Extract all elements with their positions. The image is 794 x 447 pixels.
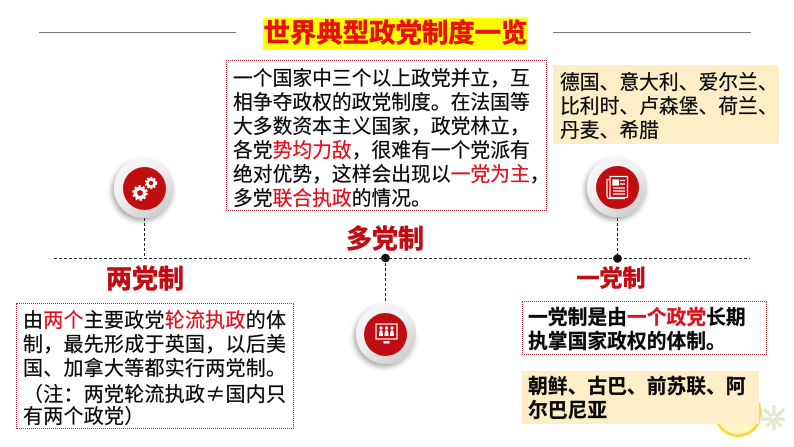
panel: multi-party definition: 一个国家中三个以上政党并立，互 <box>233 68 530 90</box>
panel: two-party definition: 有两个政党） <box>23 406 144 428</box>
panel: multi-party definition: 绝对优势，这样会出现以一党为主， <box>233 164 550 186</box>
panel: two-party definition: （注：两党轮流执政 国内只 <box>23 384 286 406</box>
heading: one-party: 一党制 <box>576 265 646 291</box>
panel: multi-party countries: 比利时、卢森堡、荷兰、 <box>560 96 778 118</box>
panel: one-party countries: 尔巴尼亚 <box>528 400 607 422</box>
panel: one-party countries <box>522 371 759 424</box>
panel: multi-party definition: 相争夺政权的政党制度。在法国等 <box>233 92 530 114</box>
decoration: lemon slices <box>716 401 786 437</box>
panel: multi-party countries: 德国、意大利、爱尔兰、 <box>560 72 778 94</box>
icon: gears <box>114 158 174 218</box>
panel: two-party definition: ≠ <box>205 378 226 407</box>
panel: multi-party definition: 各党势均力敌，很难有一个党派有 <box>233 140 530 162</box>
heading: multi-party: 多党制 <box>346 224 424 254</box>
panel: multi-party definition: 多党联合执政的情况。 <box>233 188 431 210</box>
panel: two-party definition: 国、加拿大等都实行两党制。 <box>23 358 286 380</box>
panel: multi-party definition: 大多数资本主义国家，政党林立， <box>233 116 530 138</box>
panel: two-party definition <box>16 303 294 429</box>
decorative rule: top right <box>553 32 751 33</box>
panel: two-party definition: 制，最先形成于英国，以后美 <box>23 334 286 356</box>
panel: one-party countries: 朝鲜、古巴、前苏联、阿 <box>528 376 746 398</box>
heading: two-party: 两党制 <box>106 264 184 294</box>
panel: two-party definition: 由两个主要政党轮流执政的体 <box>23 310 286 332</box>
panel: one-party definition <box>522 301 767 355</box>
title: 世界典型政党制度一览 <box>264 18 527 48</box>
decorative rule: top left <box>39 32 236 33</box>
panel: multi-party definition <box>226 60 547 211</box>
panel: multi-party countries <box>553 65 779 144</box>
panel: one-party definition: 一党制是由一个政党长期 <box>528 307 746 329</box>
icon: monitor with people <box>356 304 416 364</box>
icon: newspaper <box>587 157 647 217</box>
panel: one-party definition: 执掌国家政权的体制。 <box>528 331 726 353</box>
panel: multi-party countries: 丹麦、希腊 <box>560 120 659 142</box>
